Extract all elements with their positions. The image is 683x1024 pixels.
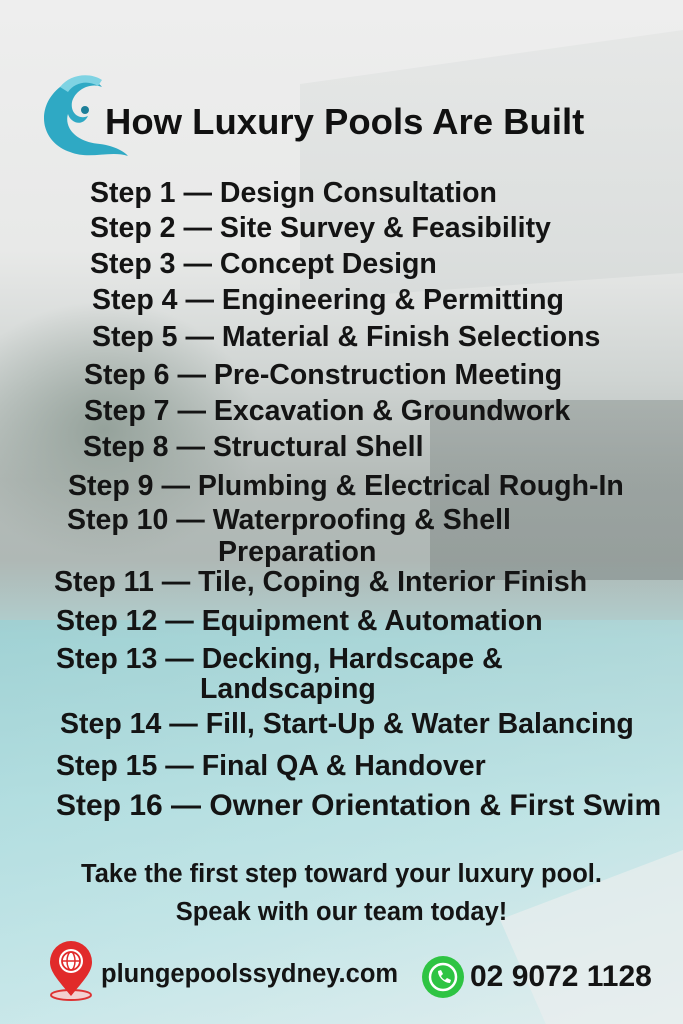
step 6: Step 6 — Pre-Construction Meeting	[84, 359, 562, 391]
step 9: Step 9 — Plumbing & Electrical Rough-In	[68, 470, 624, 502]
step 15: Step 15 — Final QA & Handover	[56, 750, 486, 782]
step 10: Preparation	[218, 536, 376, 568]
step 3: Step 3 — Concept Design	[90, 248, 437, 280]
step 13: Step 13 — Decking, Hardscape &	[56, 643, 503, 675]
step 13: Landscaping	[200, 673, 376, 705]
step 4: Step 4 — Engineering & Permitting	[92, 284, 564, 316]
step 2: Step 2 — Site Survey & Feasibility	[90, 212, 551, 244]
step 13	[56, 643, 503, 705]
phone number: 02 9072 1128	[470, 960, 652, 993]
icon: wave logo	[44, 75, 128, 156]
call to action	[81, 860, 602, 926]
background: greenery left	[0, 300, 260, 560]
step 10: Step 10 — Waterproofing & Shell	[67, 504, 511, 536]
website: plungepoolssydney.com	[101, 960, 398, 988]
step 8: Step 8 — Structural Shell	[83, 431, 424, 463]
background: deck bottom right	[500, 850, 683, 1024]
call to action: Take the first step toward your luxury pool.	[81, 860, 602, 888]
background: house wall	[300, 62, 683, 288]
title: How Luxury Pools Are Built	[105, 101, 584, 142]
call to action: Speak with our team today!	[176, 898, 507, 926]
background: pool	[0, 620, 683, 1024]
background: house dark interior	[430, 400, 683, 580]
step 16: Step 16 — Owner Orientation & First Swim	[56, 789, 661, 822]
step 12: Step 12 — Equipment & Automation	[56, 605, 543, 637]
step 11: Step 11 — Tile, Coping & Interior Finish	[54, 566, 587, 598]
icon: phone	[422, 956, 464, 998]
steps list	[54, 177, 661, 822]
step 1: Step 1 — Design Consultation	[90, 177, 497, 209]
step 7: Step 7 — Excavation & Groundwork	[84, 395, 570, 427]
step 14: Step 14 — Fill, Start-Up & Water Balancing	[60, 708, 634, 740]
step 10	[67, 504, 511, 568]
step 5: Step 5 — Material & Finish Selections	[92, 321, 600, 353]
icon: location globe pin	[50, 941, 92, 1001]
